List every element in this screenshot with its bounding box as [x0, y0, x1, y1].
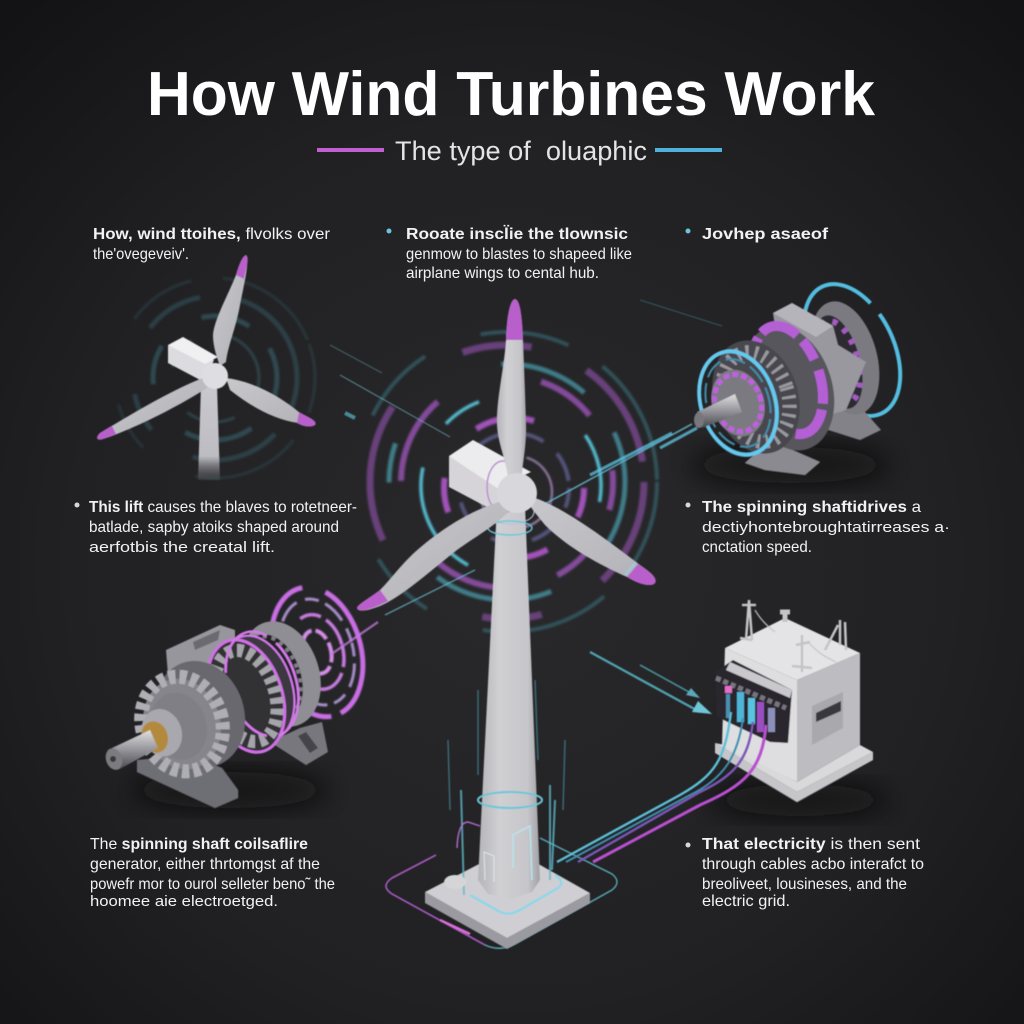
text block: electricity: That electricity is then sent — [702, 836, 921, 853]
text block: overview: the'ovegeveiv'. — [93, 246, 189, 263]
left generator purple energy swirl — [257, 577, 377, 727]
text block: shaft: cnctation speed. — [702, 539, 812, 556]
tower — [478, 505, 540, 899]
main turbine — [357, 299, 656, 949]
transformer box — [710, 600, 890, 816]
connector lines and arrows — [330, 300, 722, 714]
text block: blades: airplane wings to cental hub. — [406, 265, 599, 282]
left generator gear — [126, 666, 235, 783]
text block: generator — [90, 836, 335, 910]
small blade up — [213, 255, 248, 366]
left generator — [103, 577, 378, 808]
nacelle — [449, 440, 531, 514]
text block: generator: powefr mor to ourol selleter beno˜ the — [90, 876, 335, 893]
subtitle with accent lines: The type of oluaphic — [395, 136, 647, 166]
left generator rear foot — [270, 722, 328, 765]
text block: lift: This lift causes the blaves to rotetneer- — [89, 499, 357, 516]
text block: generator: hoomee aie electroetged. — [90, 893, 278, 910]
text block: shaft: The spinning shaftidrives a — [702, 499, 921, 516]
right generator back cyan ring — [784, 269, 920, 431]
text block: lift — [74, 499, 357, 556]
text block: electricity: breoliveet, lousineses, and the — [702, 876, 907, 893]
blade lower left — [357, 500, 508, 611]
title: How Wind Turbines Work — [147, 60, 876, 129]
text block: lift: aerfotbis the creatal lift. — [89, 539, 275, 556]
text block: generator: The spinning shaft coilsaflire — [90, 836, 308, 853]
text block: electricity: through cables acbo interafct to — [702, 856, 924, 873]
transformer top insulators — [740, 600, 846, 672]
small blade left — [97, 376, 210, 440]
cables — [557, 712, 766, 862]
small turbine — [97, 255, 316, 480]
text block: blades: Rooate inscl̈ie the tlownsic — [406, 225, 628, 243]
subtitle with accent lines — [317, 136, 722, 166]
small hub — [202, 363, 228, 389]
hub — [497, 473, 537, 513]
right generator — [660, 269, 920, 483]
small tower — [198, 385, 220, 480]
right generator cyan ring and shaft — [686, 341, 790, 465]
text block: generator: generator, either thrtomgst af the — [90, 856, 320, 873]
text block: electricity — [686, 836, 924, 910]
motion rings: main turbine — [357, 332, 657, 632]
blade up — [497, 299, 526, 484]
small nacelle — [168, 337, 218, 382]
text block: overview: How, wind ttoihes, flvolks over — [93, 226, 331, 243]
left generator top block — [166, 625, 235, 700]
text block: lift: batlade, sapby atoiks shaped around — [89, 519, 339, 536]
text block: shaft — [686, 499, 950, 556]
text block: electricity: electric grid. — [702, 893, 790, 910]
text block: blades — [386, 225, 632, 282]
motion rings: small turbine — [87, 250, 343, 506]
text block: overview — [93, 226, 331, 263]
blade lower right — [530, 498, 656, 585]
tower holographic details — [444, 680, 565, 914]
platform outline — [386, 838, 617, 948]
transformer module bank — [715, 660, 792, 743]
transformer label plate — [812, 692, 843, 745]
base plate — [425, 848, 590, 949]
text block: top right: Jovhep asaeof — [702, 226, 829, 243]
text block: blades: genmow to blastes to shapeed like — [406, 246, 632, 263]
left generator front foot — [137, 755, 238, 808]
text block: shaft: dectiyhontebroughtatirreases a· — [702, 519, 950, 536]
small blade right — [226, 378, 316, 426]
